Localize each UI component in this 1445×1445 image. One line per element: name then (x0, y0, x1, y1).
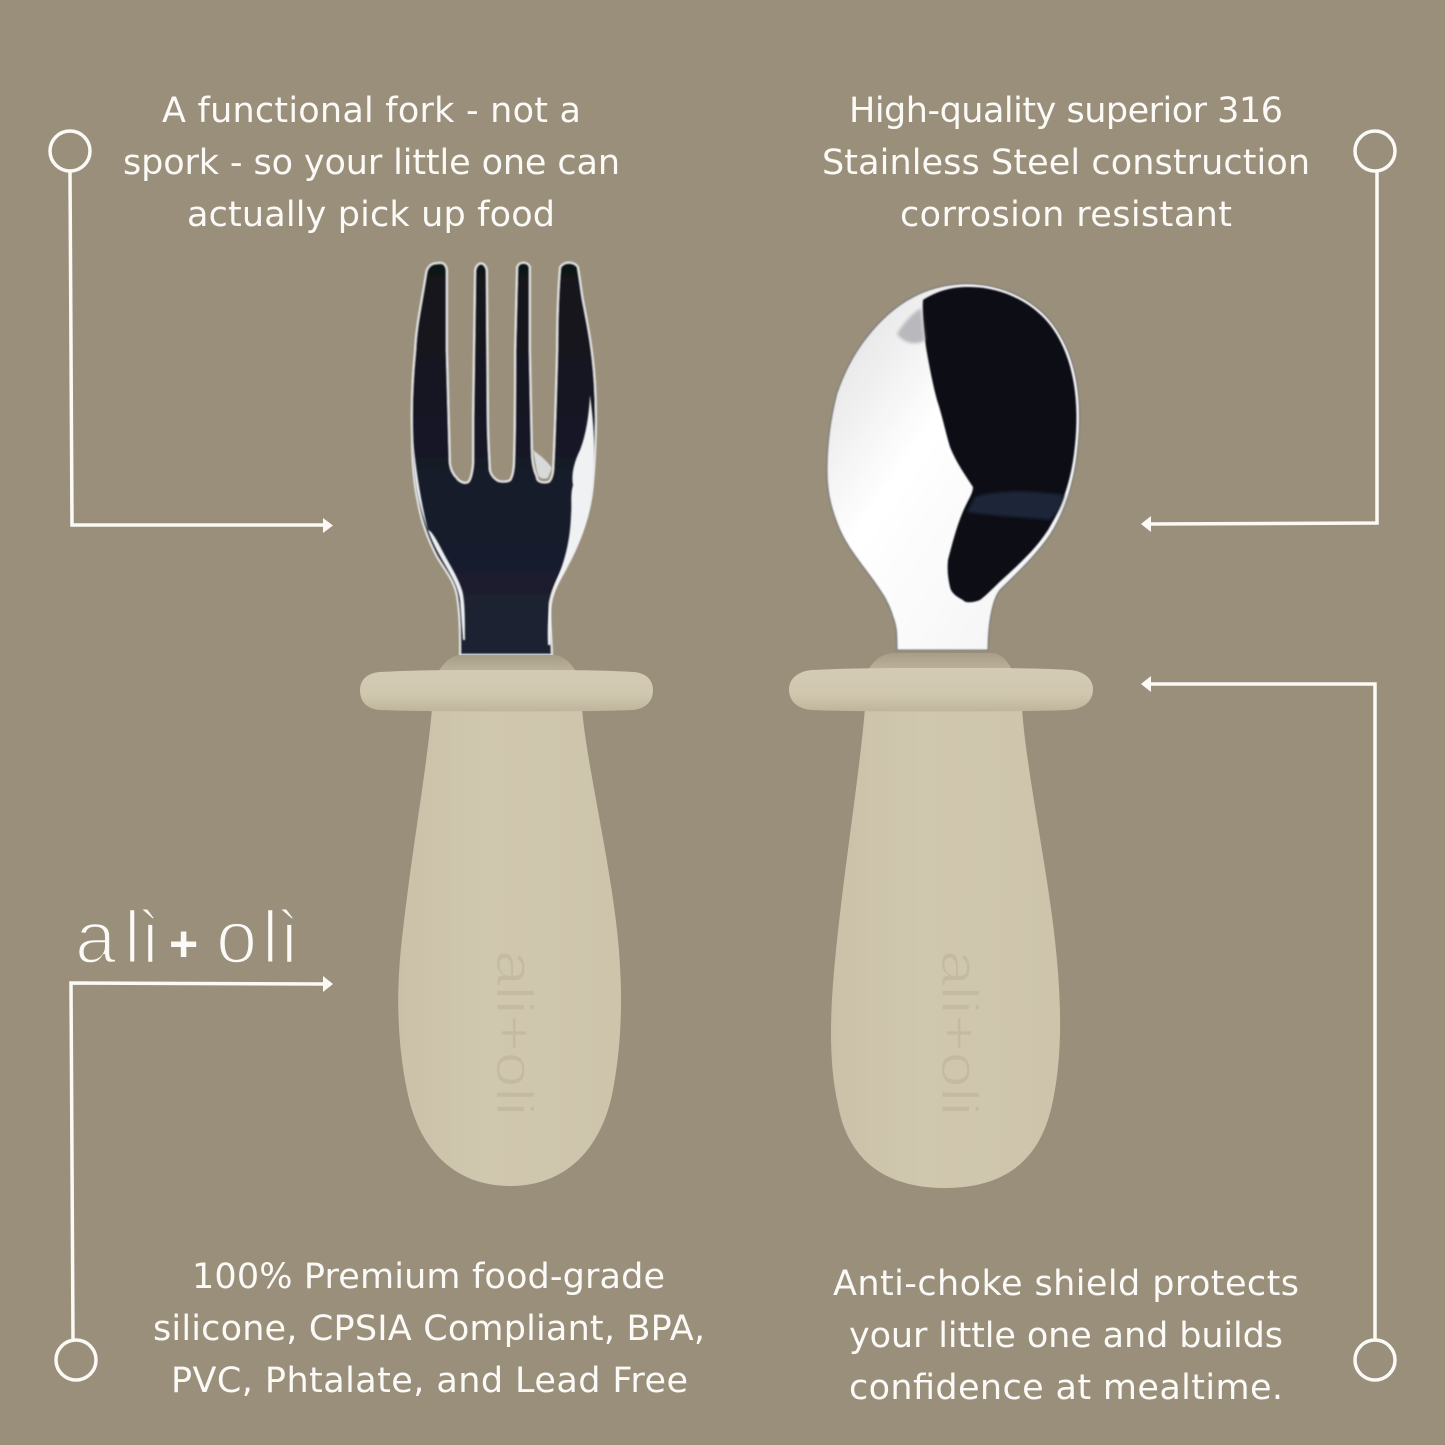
spoon shield (789, 668, 1093, 712)
fork left reflection (413, 440, 465, 640)
fork shield (360, 670, 653, 712)
text: silicone feature (153, 1257, 705, 1401)
fork handle (398, 708, 621, 1186)
spoon collar (864, 653, 1016, 677)
text: stainless steel feature: High-quality superior 316 (849, 91, 1283, 131)
callout arrow: top left to fork (50, 131, 333, 533)
callout arrow: top right to spoon (1141, 131, 1395, 532)
logo: ali + oli: + (169, 916, 198, 972)
text: anti-choke shield feature (833, 1264, 1299, 1408)
text: stainless steel feature (822, 91, 1310, 235)
text: silicone feature: PVC, Phtalate, and Lead Free (171, 1361, 688, 1401)
text: stainless steel feature: Stainless Steel construction (822, 143, 1310, 183)
spoon handle embossed logo: ali+oli (930, 950, 988, 1116)
logo: ali + oli: olì (216, 896, 300, 979)
text: fork feature: spork - so your little one can (123, 143, 620, 183)
text: stainless steel feature: corrosion resistant (900, 195, 1232, 235)
text: anti-choke shield feature: confidence at mealtime. (849, 1368, 1283, 1408)
text: anti-choke shield feature: Anti-choke shield protects (833, 1264, 1299, 1304)
spoon bowl (827, 284, 1079, 650)
callout arrow: bottom right to shield (1141, 676, 1395, 1380)
fork collar (435, 655, 580, 678)
text: anti-choke shield feature: your little one and builds (849, 1316, 1283, 1356)
callout arrow: bottom left to handle (56, 976, 333, 1380)
text: fork feature (123, 91, 620, 235)
fork right reflection (548, 395, 594, 645)
text: fork feature: actually pick up food (187, 195, 555, 235)
fork head (412, 262, 596, 655)
text: fork feature: A functional fork - not a (162, 91, 581, 131)
fork handle embossed logo: ali+oli (485, 950, 543, 1116)
logo: ali + oli: alì (75, 896, 161, 979)
fork (360, 262, 653, 1186)
spoon (789, 284, 1093, 1188)
logo: ali + oli (75, 896, 300, 979)
spoon handle (831, 708, 1060, 1188)
text: silicone feature: silicone, CPSIA Compliant, BPA, (153, 1309, 705, 1349)
text: silicone feature: 100% Premium food-grade (192, 1257, 665, 1297)
